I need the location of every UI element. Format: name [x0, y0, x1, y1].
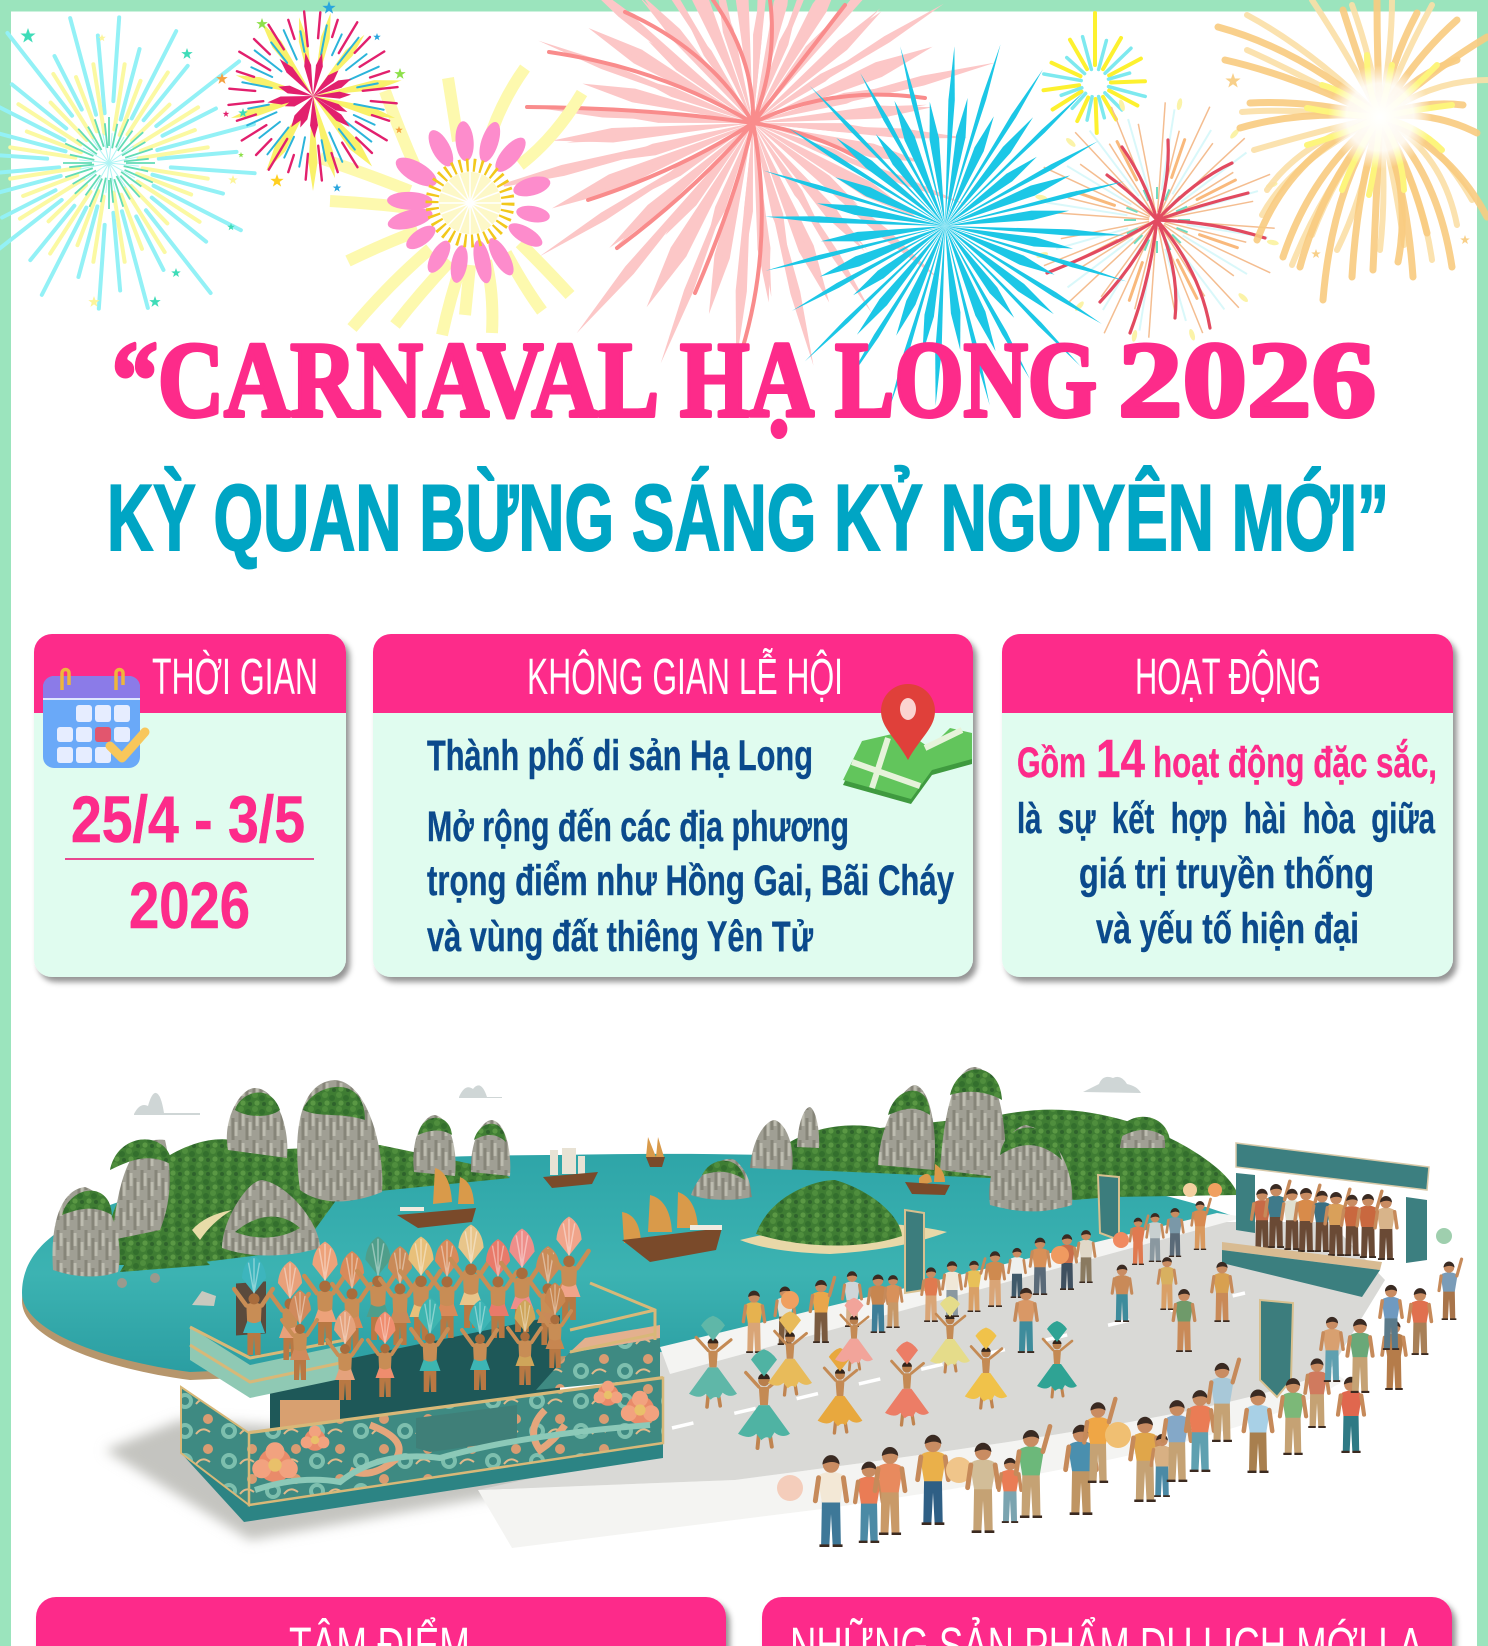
panel header: activities — [1002, 634, 1453, 713]
date range: 25/4 - 3/5 — [71, 782, 305, 856]
text: activities description: và yếu tố hiện đại — [1096, 905, 1359, 953]
heading: time: THỜI GIAN — [152, 648, 318, 705]
text: festival locations: và vùng đất thiêng Yên Tử — [427, 913, 814, 961]
heading: festival space: KHÔNG GIAN LỄ HỘI — [527, 647, 843, 705]
panel header: festival space — [373, 634, 973, 713]
firework: salmon curved streaks — [527, 0, 925, 350]
firework: red curved streaks — [1047, 140, 1265, 333]
title line 1: “CARNAVAL — [112, 321, 659, 440]
float shadow — [105, 1420, 660, 1540]
text: festival locations: Thành phố di sản Hạ Long — [427, 732, 813, 780]
carnival float — [181, 1281, 663, 1522]
panel header: time — [34, 634, 346, 713]
text: activities description: giá trị truyền thống — [1079, 850, 1374, 898]
icon: map and pin — [843, 684, 972, 804]
firework: cyan and yellow burst — [0, 17, 255, 309]
performers on float: front row — [282, 1282, 571, 1400]
text: festival locations: trọng điểm như Hồng Gai, Bãi Cháy — [427, 857, 954, 905]
year: 2026 — [129, 868, 250, 942]
stage — [1222, 1143, 1452, 1297]
icon: calendar — [43, 670, 145, 768]
panel: festival space — [373, 634, 973, 977]
road centre dashes — [672, 1293, 1245, 1428]
illustration: carnival on Ha Long bay — [22, 1067, 1462, 1548]
clouds — [134, 1077, 1141, 1115]
firework: cyan burst — [763, 44, 1127, 408]
banners — [905, 1175, 1293, 1397]
firework: orange and gold burst — [1218, 0, 1487, 300]
firework: small yellow and cyan burst — [1044, 13, 1145, 133]
heading: activities: HOẠT ĐỘNG — [1135, 648, 1321, 705]
firework: salmon pink burst — [480, 0, 997, 367]
panel: time — [34, 634, 346, 977]
title line 1: 2026 — [1118, 321, 1376, 440]
text: festival locations — [427, 732, 954, 961]
junk boats — [397, 1137, 950, 1262]
panel: activities — [1002, 634, 1453, 977]
firework: crimson and blue burst — [228, 11, 403, 191]
title line 1: LONG — [835, 321, 1097, 440]
title line 1 — [112, 321, 1376, 440]
title line 1: HẠ — [680, 321, 814, 440]
fireworks banner — [0, 0, 1487, 408]
karst islands right — [691, 1067, 1238, 1254]
spectators back row — [743, 1183, 1222, 1353]
karst islands left — [52, 1080, 510, 1306]
text: festival locations: Mở rộng đến các địa phương — [427, 803, 849, 851]
date divider — [65, 858, 314, 860]
firework: peach and red burst — [1035, 98, 1279, 342]
road — [478, 1222, 1385, 1548]
decorative stars — [20, 1, 1470, 307]
performers on float: back row — [234, 1216, 589, 1360]
float: painted flowers and dragons — [252, 1381, 659, 1490]
panel: focus — [36, 1597, 726, 1646]
bay water — [22, 1154, 1245, 1380]
panel: new tourism products — [762, 1597, 1452, 1646]
dancers on road — [689, 1296, 1077, 1448]
text: activities description: Gồm — [1017, 739, 1086, 787]
firework glow — [1328, 65, 1432, 169]
firework: pink and yellow burst — [320, 68, 582, 335]
text: activities description — [1017, 729, 1437, 953]
drummers — [1015, 1257, 1232, 1353]
spectators front row — [777, 1259, 1462, 1547]
text: activities description: 14 — [1096, 729, 1145, 789]
